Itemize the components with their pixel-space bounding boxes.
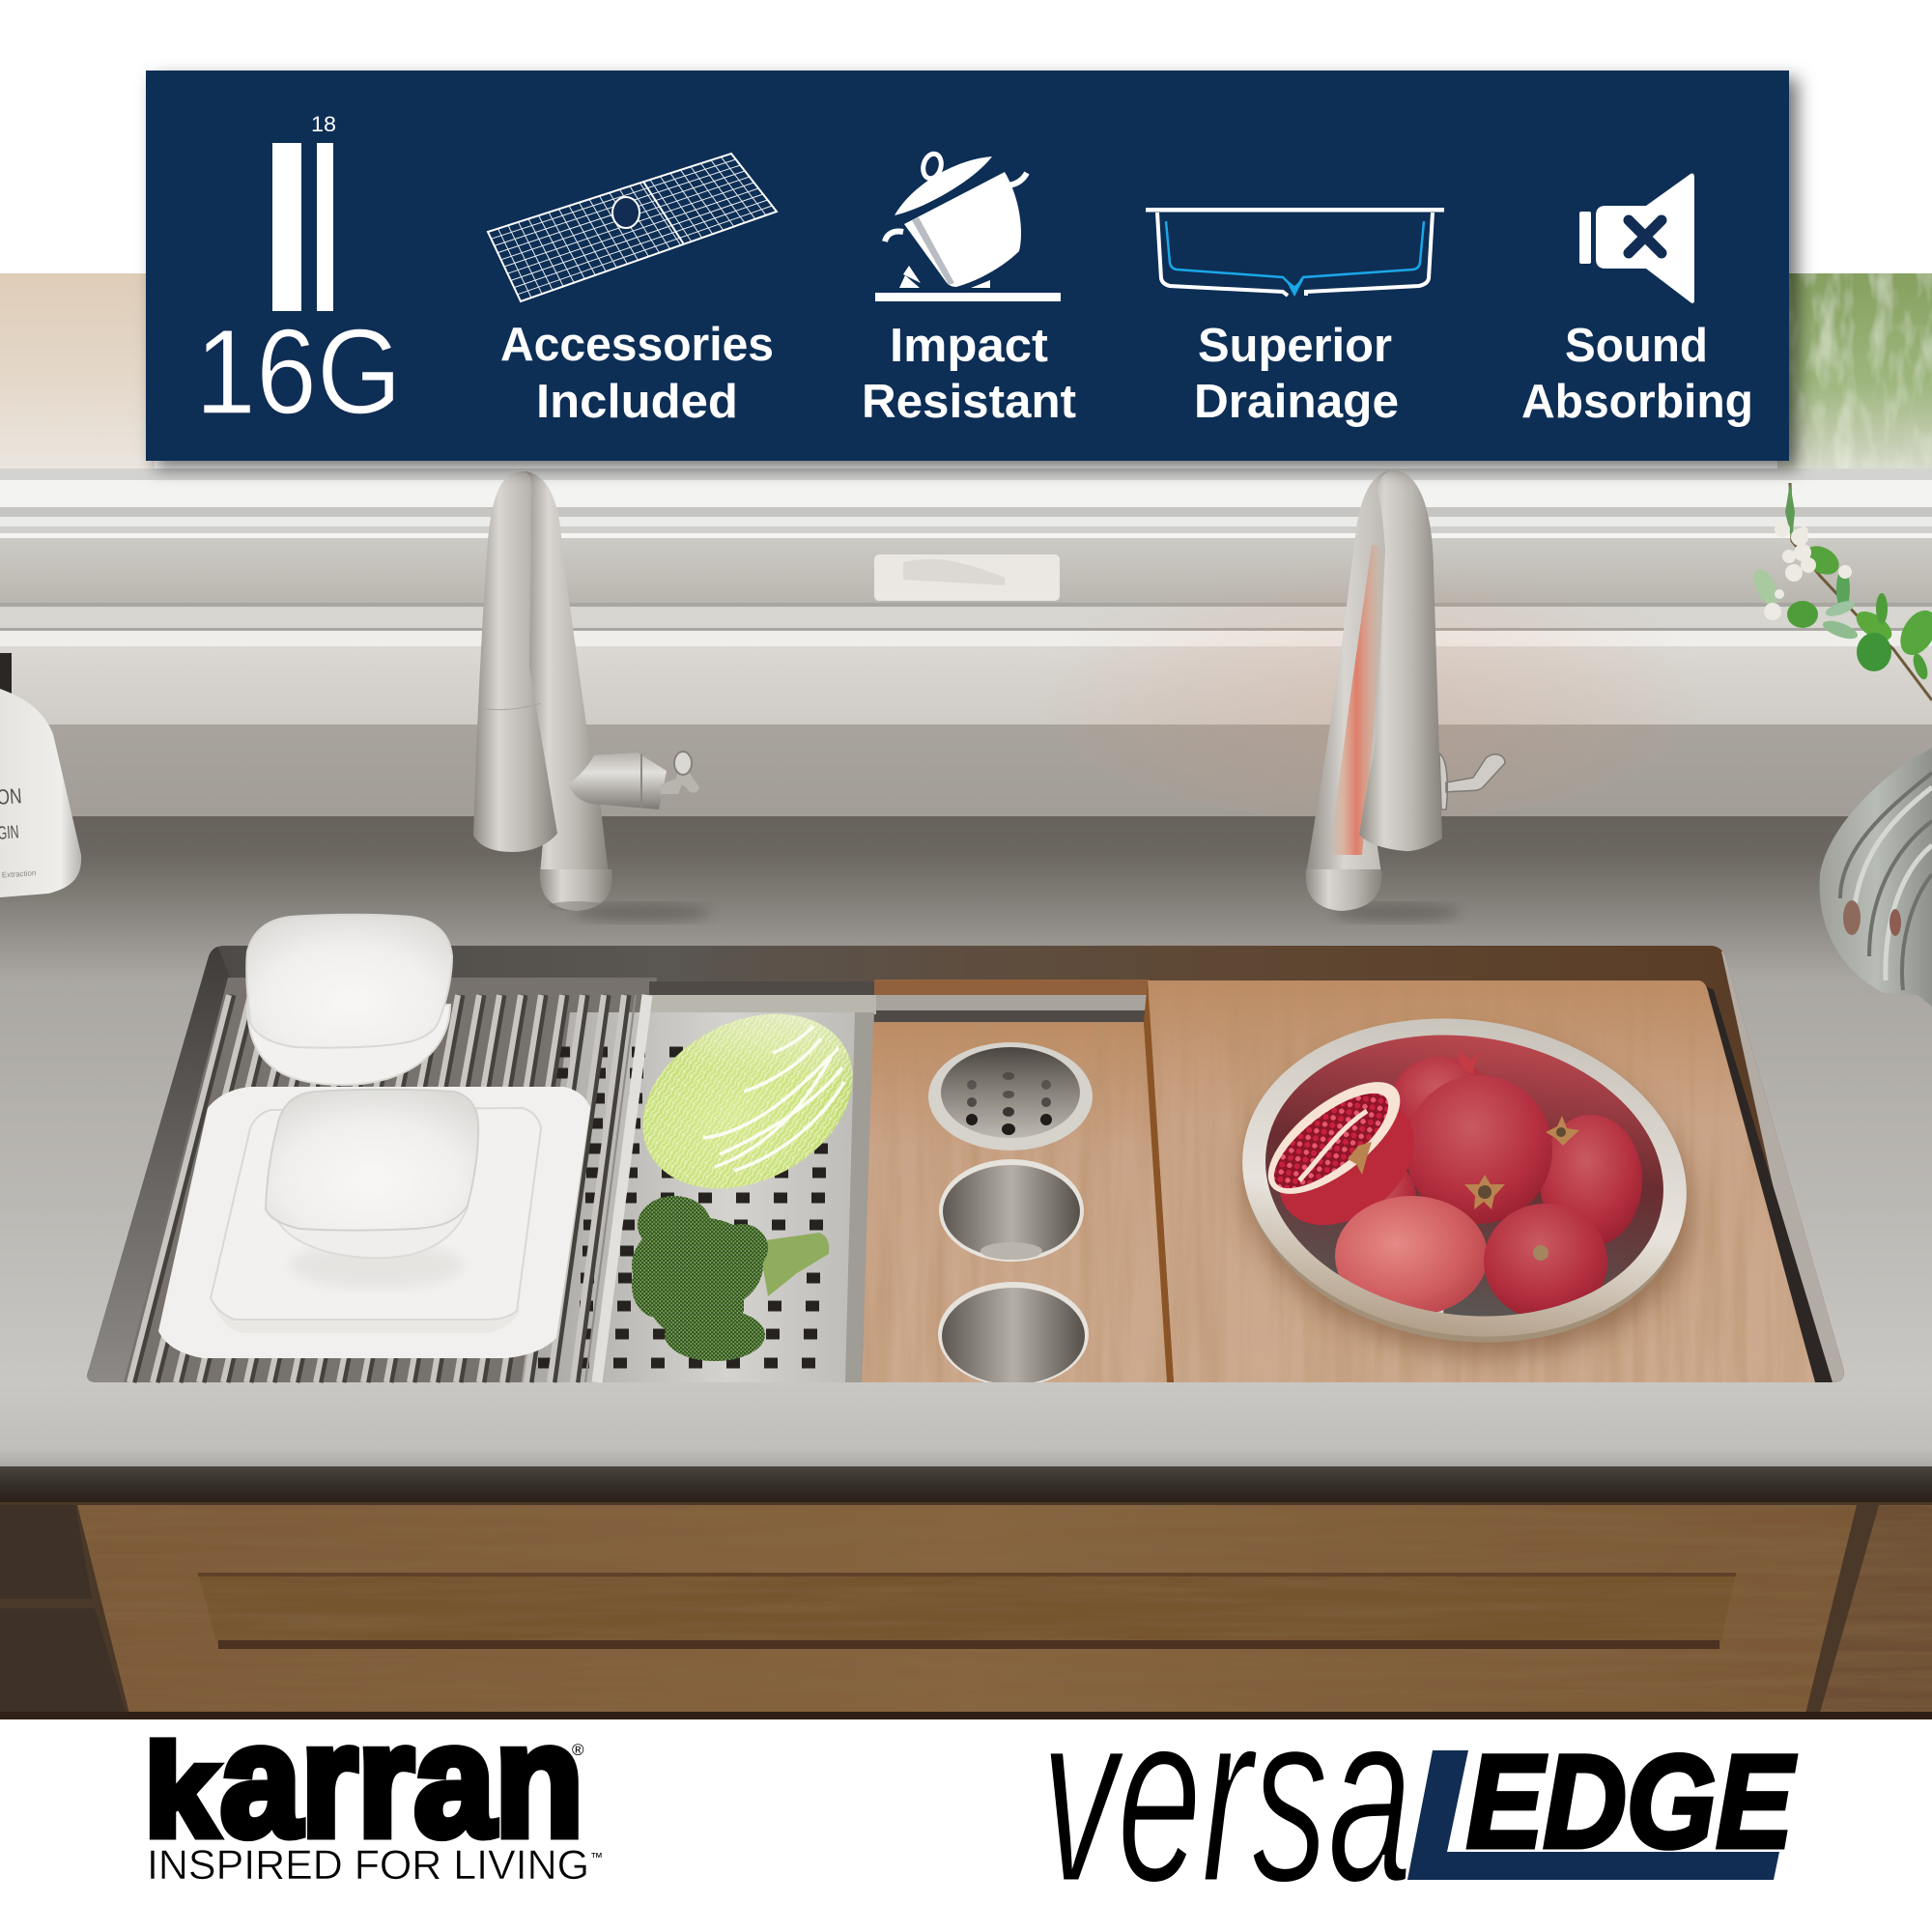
registered mark: ® <box>572 1741 584 1759</box>
bowl shadow on plate <box>290 1242 464 1289</box>
logo: karran <box>145 1691 603 1889</box>
faucet foot <box>1306 869 1381 911</box>
window view: right garden <box>1777 273 1932 471</box>
red reflection <box>1329 545 1383 855</box>
label: Superior <box>1198 320 1392 372</box>
feature: accessories included <box>488 154 777 428</box>
cup two <box>939 1159 1084 1262</box>
cup three <box>938 1282 1089 1386</box>
countertop <box>0 816 1932 1468</box>
logo: versaledge <box>1041 1662 1796 1932</box>
cabinet door <box>77 1505 1857 1718</box>
rack rail <box>597 995 647 1382</box>
faucet head <box>473 471 557 852</box>
pomegranate: right <box>1540 1115 1642 1246</box>
faucet foot <box>540 869 612 911</box>
sink <box>77 915 1855 1386</box>
front bowl <box>266 1090 478 1258</box>
bottom white footer <box>0 1719 1932 1932</box>
countertop front edge <box>0 1466 1932 1502</box>
tray holes <box>538 1052 835 1363</box>
versa wordmark: versa <box>1041 1662 1412 1932</box>
thick bar <box>272 143 301 311</box>
feature: sound absorbing <box>1521 174 1753 428</box>
blue L <box>1407 1750 1779 1880</box>
handle <box>568 752 699 810</box>
window view: left blurred wood <box>0 273 155 471</box>
sink basin <box>87 946 1844 1382</box>
plant sprig <box>1748 483 1932 700</box>
right faucet <box>1306 470 1505 923</box>
perforated tray <box>522 1012 865 1382</box>
handle <box>1439 753 1505 810</box>
pomegranate: bottom left <box>1335 1196 1488 1316</box>
vase <box>1820 748 1932 1007</box>
icon: muted speaker <box>1579 174 1694 303</box>
faucet shadow <box>575 903 710 923</box>
left faucet <box>473 471 710 923</box>
pomegranates <box>1267 1057 1642 1314</box>
wood board: large <box>1148 980 1815 1382</box>
cabinet <box>0 1502 1932 1719</box>
label 16G: 16G <box>195 305 402 440</box>
window sill and wall mouldings <box>0 469 1932 821</box>
pomegranate: large <box>1406 1075 1552 1224</box>
label: Impact <box>890 320 1048 372</box>
feature: 16 gauge steel <box>195 112 402 440</box>
plates <box>158 1087 590 1358</box>
trademark: ™ <box>590 1850 603 1864</box>
under rack <box>124 978 657 1382</box>
feature: superior drainage <box>1146 208 1444 428</box>
wood board: small with cups <box>862 1022 1169 1382</box>
right slot <box>1698 982 1833 1382</box>
icon: falling pot <box>875 152 1061 301</box>
faucet head <box>1359 470 1442 851</box>
pomegranate: bottom right <box>1484 1204 1607 1320</box>
icon: sink basin section <box>1146 208 1444 297</box>
feature banner <box>146 71 1789 461</box>
head seam <box>481 703 541 710</box>
right wall <box>1721 952 1855 1382</box>
label line two: Drainage <box>1194 376 1399 428</box>
tray top ledge <box>649 981 1150 1022</box>
window latch <box>874 554 1060 601</box>
pomegranate: halved <box>1267 1082 1414 1225</box>
broccoli <box>632 1196 829 1361</box>
right door <box>1818 1505 1932 1719</box>
wordmark: k <box>145 1719 217 1863</box>
faucet tube <box>523 471 609 874</box>
feature: impact resistant <box>862 152 1076 428</box>
left wall <box>77 946 232 1382</box>
faucet shadow <box>1333 903 1459 923</box>
board edge shade <box>1144 980 1174 1382</box>
tray right side <box>845 1012 874 1382</box>
label line two: Absorbing <box>1521 376 1753 428</box>
colander <box>1242 1018 1687 1343</box>
soap bottle: Extraction <box>2 868 37 880</box>
recessed door panel <box>198 1573 1736 1649</box>
label: Sound <box>1565 320 1708 372</box>
soap bottle <box>0 653 81 897</box>
cabbage <box>612 980 883 1223</box>
faucet tube <box>1306 470 1434 874</box>
pomegranate crowns <box>1348 1049 1579 1261</box>
pomegranate: middle <box>1383 1171 1416 1200</box>
left drawers <box>0 1505 128 1719</box>
label line two: Included <box>536 376 738 428</box>
thin bar <box>317 143 333 311</box>
label 18: 18 <box>311 112 336 136</box>
wordmark: arran <box>220 1691 583 1870</box>
colander shadow <box>1224 1008 1713 1384</box>
pomegranate: back <box>1394 1057 1482 1124</box>
roll-up rack <box>129 995 647 1382</box>
label line two: Resistant <box>862 376 1076 428</box>
stacked bowls rear <box>246 915 452 1085</box>
icon: bottom grid <box>488 154 777 301</box>
cup with holes <box>928 1042 1093 1151</box>
edge wordmark: EDGE <box>1466 1728 1796 1876</box>
label: Accessories <box>500 319 774 371</box>
tagline: INSPIRED FOR LIVING <box>147 1842 589 1889</box>
